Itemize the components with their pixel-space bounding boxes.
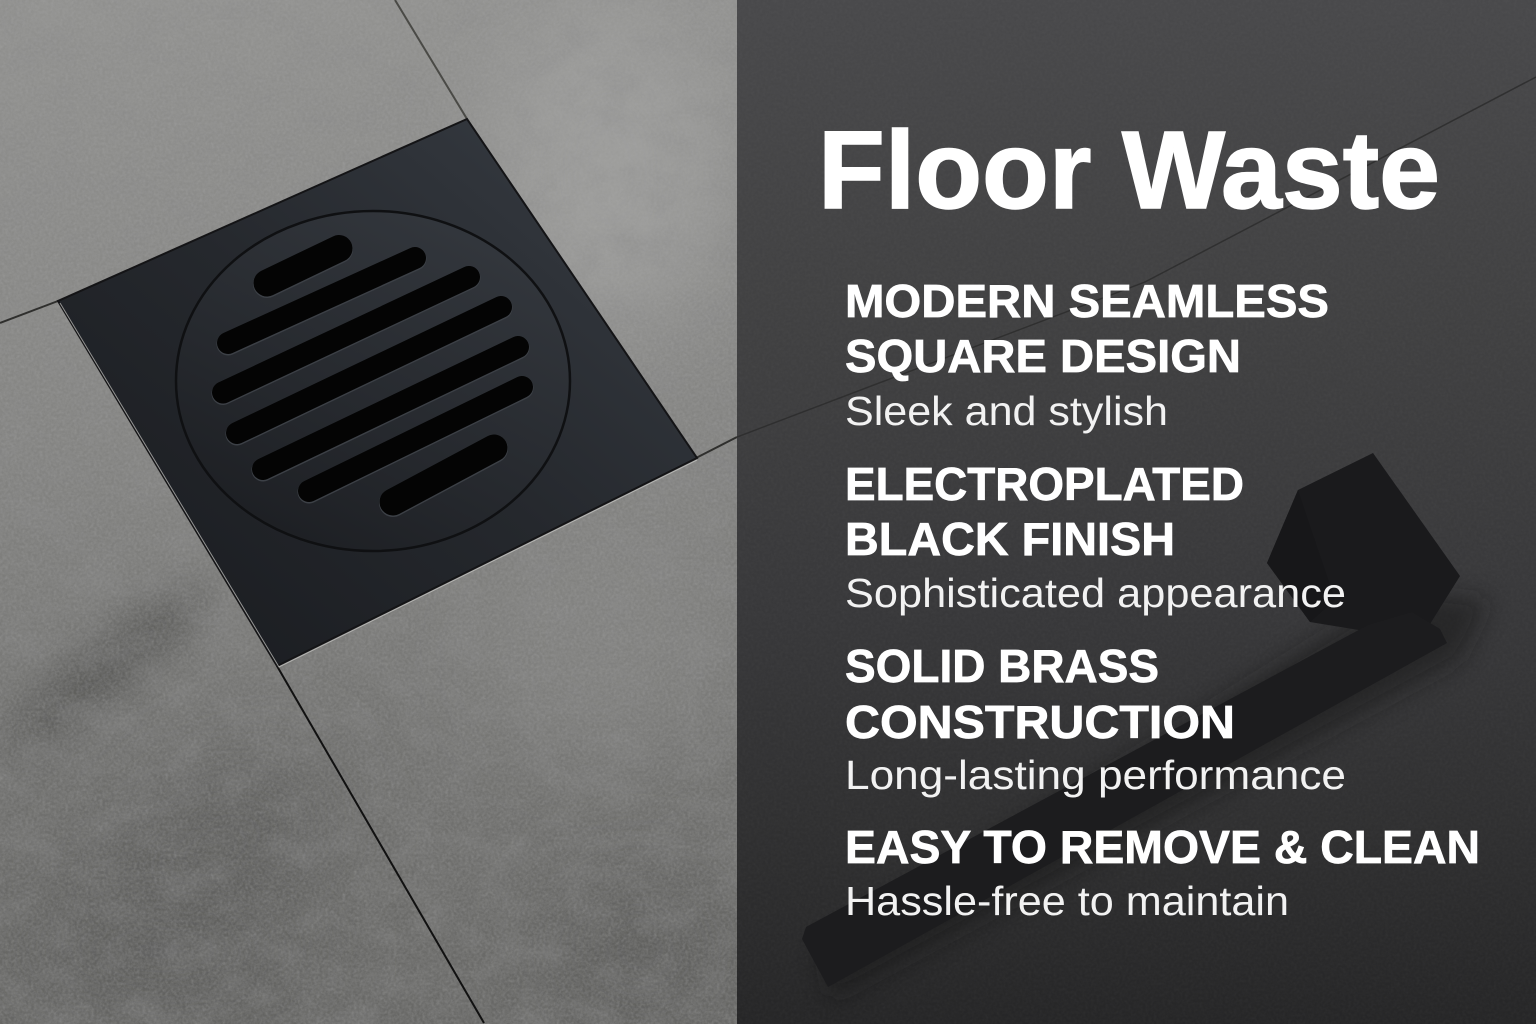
feature: modern seamless square design — [845, 275, 1329, 434]
feature: solid brass construction — [845, 640, 1346, 798]
feature: modern seamless square design: MODERN SEAMLESS — [845, 275, 1329, 327]
handle shadow — [820, 590, 1490, 1000]
round grate cover — [176, 211, 570, 551]
feature: solid brass construction: Long-lasting performance — [845, 752, 1346, 798]
panel: dark text background — [737, 0, 1536, 1024]
feature: easy to remove and clean: Hassle-free to maintain — [845, 878, 1289, 924]
handle head side face — [1267, 490, 1310, 622]
feature: easy to remove and clean — [845, 821, 1480, 924]
feature: electroplated black finish: Sophisticated appearance — [845, 570, 1346, 616]
feature: electroplated black finish: ELECTROPLATED — [845, 458, 1244, 510]
handle head block — [1267, 453, 1460, 640]
black towel bar handle — [802, 453, 1490, 1000]
grate slots — [223, 248, 522, 503]
feature: solid brass construction: SOLID BRASS — [845, 640, 1159, 692]
feature: modern seamless square design: SQUARE DESIGN — [845, 330, 1241, 382]
tile seams — [0, 0, 737, 1023]
feature: electroplated black finish — [845, 458, 1346, 616]
panel: tiled floor photo — [0, 0, 737, 1024]
title: Floor Waste — [818, 109, 1440, 232]
drain square plate — [58, 119, 697, 666]
feature: electroplated black finish: BLACK FINISH — [845, 513, 1175, 565]
floor drain — [58, 119, 697, 667]
feature: solid brass construction: CONSTRUCTION — [845, 696, 1235, 748]
drain plate light edge — [60, 303, 697, 667]
feature: easy to remove and clean: EASY TO REMOVE & CLEAN — [845, 821, 1480, 873]
handle arm — [802, 612, 1447, 987]
feature list — [845, 275, 1480, 924]
feature: modern seamless square design: Sleek and stylish — [845, 388, 1168, 434]
